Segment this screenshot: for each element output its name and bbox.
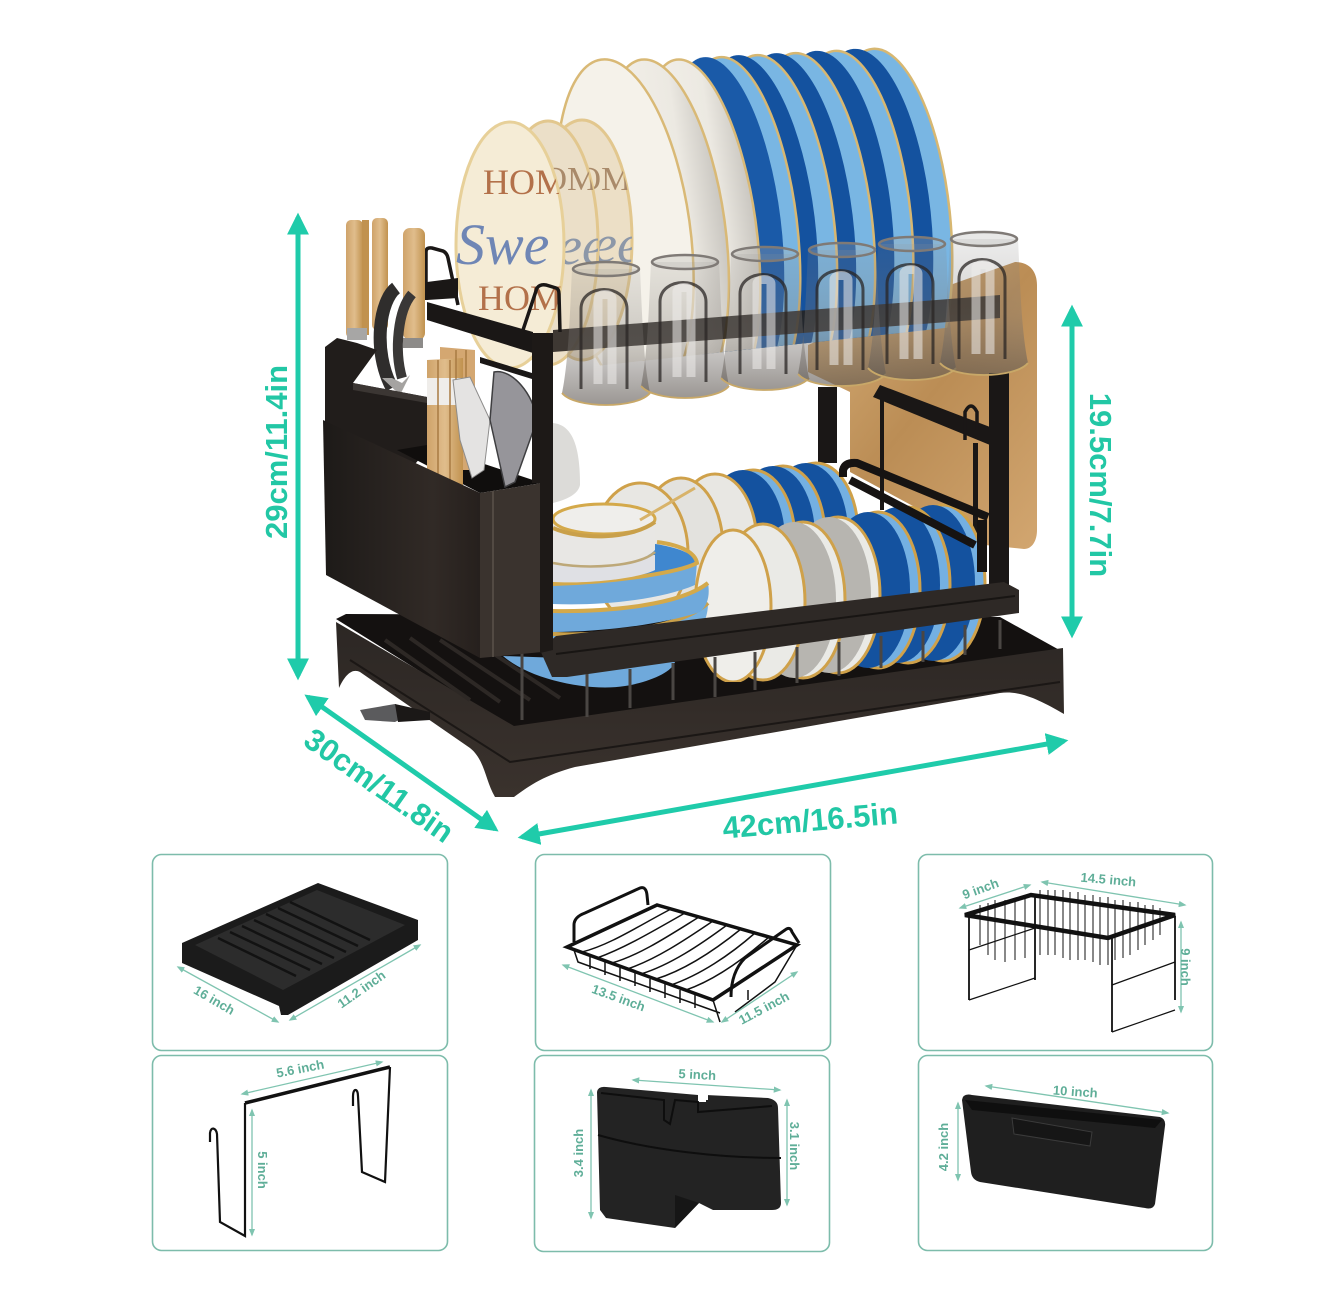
drain spout xyxy=(360,704,430,722)
blue plates xyxy=(692,48,954,354)
knives xyxy=(346,218,425,395)
panel: top rack: 9 inch xyxy=(960,875,1001,902)
depth arrow: 30cm: 30cm/11.8in xyxy=(298,721,460,850)
panel: utensil holder: 3.1 inch xyxy=(787,1122,802,1170)
main post xyxy=(532,333,553,653)
panel: drip tray xyxy=(152,854,448,1050)
large plates, upper tier xyxy=(560,48,954,366)
top rack drawing xyxy=(965,890,1175,1032)
tray top xyxy=(336,614,1063,730)
panel: utensil holder: 3.4 inch xyxy=(571,1129,586,1177)
cream plates with lettering: HOM xyxy=(552,161,631,198)
cups xyxy=(553,555,655,582)
tray xyxy=(336,614,1064,797)
panel: top rack xyxy=(918,854,1212,1050)
tier height arrow: 19.5cm: 19.5cm/7.7in xyxy=(1083,393,1118,577)
panel: utensil holder xyxy=(534,1056,830,1252)
first bowl xyxy=(553,563,697,604)
panel: knife and cutlery box: 4.2 inch xyxy=(936,1123,951,1171)
panel: top rack: 14.5 inch xyxy=(1080,870,1137,889)
hook frame drawing xyxy=(210,1067,390,1236)
panel: knife and cutlery box: 10 inch xyxy=(1052,1082,1098,1101)
width arrow: 42cm xyxy=(522,741,1064,846)
panel: top rack: 9 inch xyxy=(1178,948,1193,986)
bottom bowl under rim xyxy=(503,656,675,688)
white plates xyxy=(560,58,762,366)
rack handles and hook xyxy=(426,248,977,440)
tray drawing xyxy=(182,883,418,1015)
panel: hook frame: 5 inch xyxy=(255,1151,270,1189)
plate lettering: HOM xyxy=(483,162,567,202)
tray front faces xyxy=(336,622,1064,797)
caddy right face xyxy=(480,483,542,658)
knife block xyxy=(325,338,427,470)
plate lettering xyxy=(456,170,561,310)
rear bowls, lower tier xyxy=(592,463,858,623)
panel: hook frame: 5.6 inch xyxy=(275,1057,325,1081)
plate behind post xyxy=(553,423,580,503)
cream plates with lettering: HOM xyxy=(518,161,597,198)
panel: wire basket: 11.5 inch xyxy=(736,988,792,1028)
panel: utensil holder: 5 inch xyxy=(678,1066,716,1083)
cream plates with lettering xyxy=(456,120,641,368)
basket drawing xyxy=(567,888,799,1022)
width arrow: 42cm: 42cm/16.5in xyxy=(721,795,899,846)
plate lettering: HOM xyxy=(478,278,562,318)
plate lettering: Swe xyxy=(456,212,549,277)
tray ribs xyxy=(385,638,560,702)
panel: wire basket: 13.5 inch xyxy=(590,981,647,1014)
caddy left face xyxy=(323,420,480,658)
cup and blue bowls xyxy=(503,488,709,688)
cream plates with lettering: Swee xyxy=(530,214,641,274)
dish rack dimension infographic xyxy=(152,48,1214,1252)
box drawing xyxy=(962,1095,1165,1208)
chopsticks and cutlery xyxy=(427,347,537,487)
height arrow: 29cm: 29cm/11.4in xyxy=(259,365,294,539)
panel: drip tray: 16 inch xyxy=(191,982,237,1018)
utensil holder drawing xyxy=(597,1087,781,1228)
cream plates with lettering: Sweet xyxy=(495,216,623,276)
lower basket rim and wires xyxy=(522,463,1019,720)
depth arrow: 30cm xyxy=(298,697,495,850)
panel: hook frame xyxy=(152,1056,448,1250)
panel: drip tray: 11.2 inch xyxy=(335,967,388,1011)
second bowl xyxy=(553,583,709,632)
panel: knife and cutlery box xyxy=(918,1056,1212,1250)
cutting board xyxy=(808,262,1037,549)
panel: wire basket xyxy=(536,854,830,1050)
front plates, lower tier xyxy=(695,505,985,682)
caddy opening xyxy=(397,445,542,493)
utensil caddy xyxy=(323,218,542,658)
third bowl xyxy=(553,603,708,655)
drinking glasses xyxy=(562,232,1028,405)
upper rack frame xyxy=(427,278,1009,592)
